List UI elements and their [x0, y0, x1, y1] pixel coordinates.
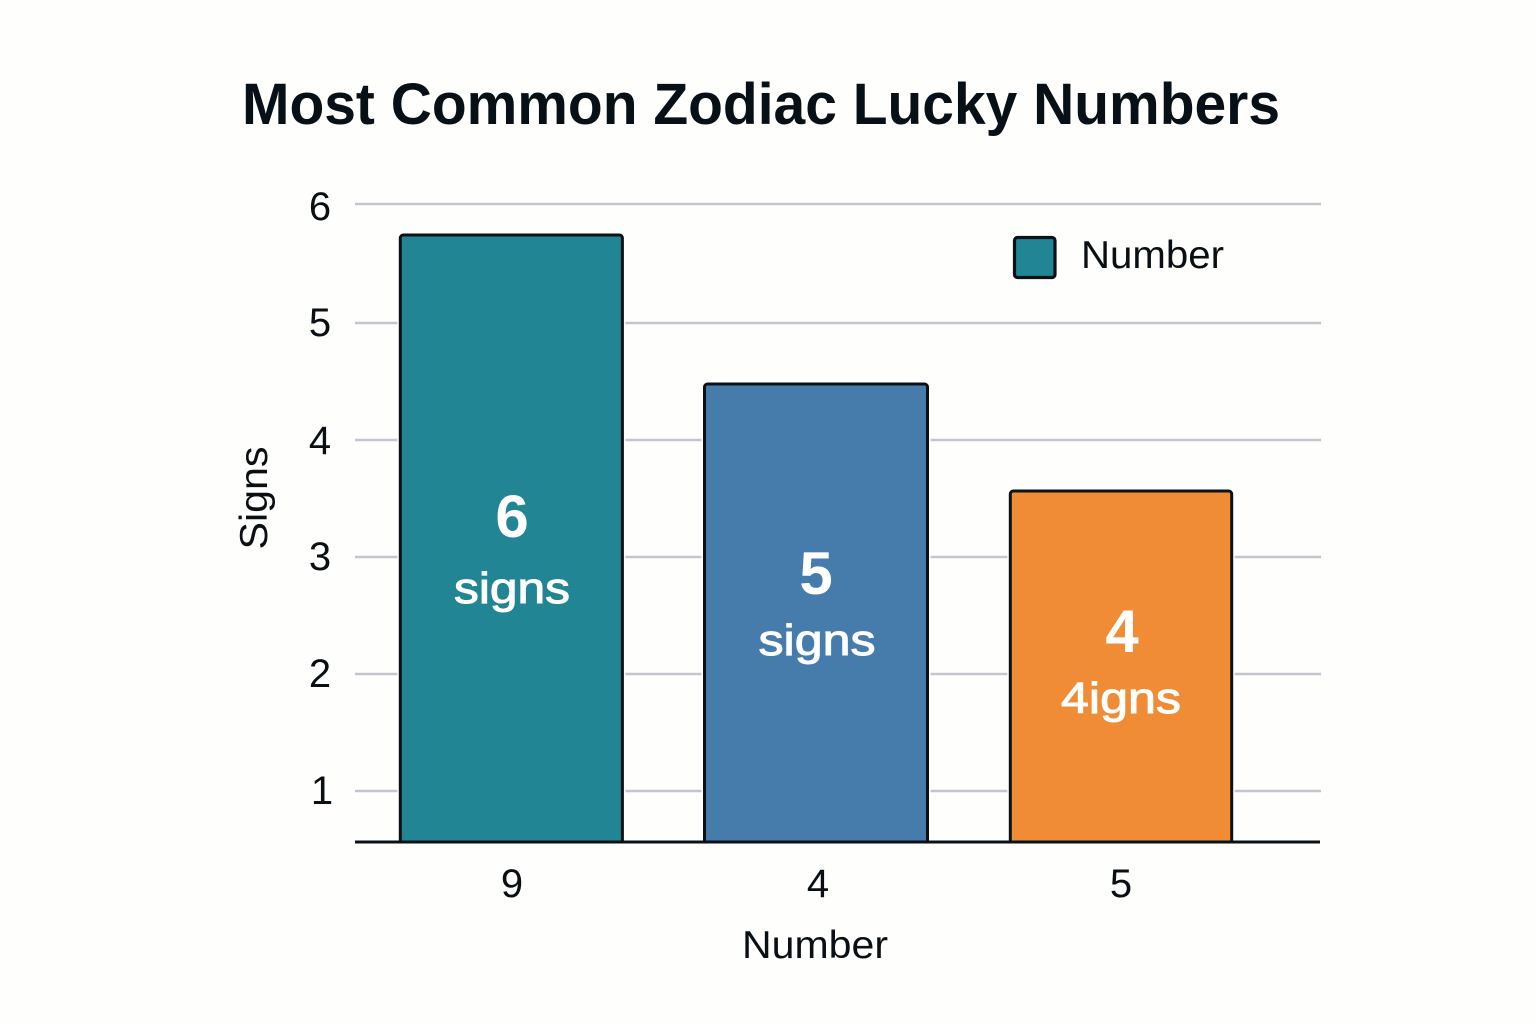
x axis tick labels: [501, 862, 1132, 906]
x axis tick labels: 9: [501, 862, 523, 906]
bar: number 9: 6: [495, 483, 529, 550]
y axis tick labels: 1: [311, 769, 333, 813]
bar: number 4: signs: [758, 616, 876, 665]
y axis tick labels: [309, 185, 333, 813]
title: Most Common Zodiac Lucky Numbers: [242, 72, 1280, 137]
legend: [1014, 234, 1224, 278]
x axis title: Number: [742, 924, 888, 967]
bar: number 9: [400, 235, 622, 842]
y axis tick labels: 4: [309, 419, 331, 463]
bar: number 5: 4igns: [1061, 674, 1181, 723]
bar: number 4: 5: [799, 540, 833, 607]
bar: number 5: [1010, 491, 1232, 842]
legend label: Number: [1081, 234, 1224, 277]
bar: number 4: [704, 384, 928, 842]
legend swatch: [1014, 238, 1055, 278]
y axis title: Signs: [233, 446, 276, 550]
y axis tick labels: 5: [309, 301, 331, 345]
y axis tick labels: 6: [309, 185, 331, 229]
bar chart: [233, 185, 1321, 967]
y axis tick labels: 3: [309, 535, 331, 579]
x axis tick labels: 5: [1110, 862, 1132, 906]
x axis line: [355, 840, 1320, 844]
bar: number 9: signs: [454, 564, 570, 613]
y axis tick labels: 2: [309, 652, 331, 696]
x axis tick labels: 4: [807, 862, 829, 906]
bar: number 5: 4: [1105, 598, 1139, 665]
